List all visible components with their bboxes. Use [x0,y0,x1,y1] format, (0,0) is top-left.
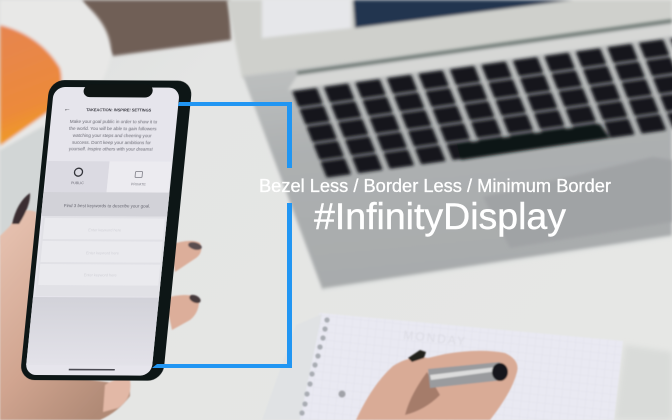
fingernail [408,350,426,362]
bottom finger [103,379,130,412]
private label: PRIVATE [131,182,147,187]
lower finger [165,295,199,330]
holding hand behind phone [0,193,203,420]
handwritten heading: MONDAY [403,328,468,349]
notebook page [262,313,623,420]
globe icon [74,168,83,176]
right hand [356,351,518,420]
keywords prompt: Find 3 best keywords to describe your goal. [64,203,151,209]
lower fingernail [188,293,202,305]
description text: watching your steps and cheering your [73,133,152,139]
pen highlight [430,367,498,380]
shadow between fingers [405,372,440,415]
lock icon [135,171,143,177]
home indicator [69,369,115,371]
notebook shadow [615,345,672,420]
description text: yourself. Inspire others with your dreams! [69,146,153,152]
public label: PUBLIC [71,181,84,185]
pen cap [492,363,508,381]
thumb fingernail [12,193,30,224]
notch [83,84,153,97]
phone body [20,80,193,381]
main hashtag title: #InfinityDisplay [314,196,566,237]
smartphone [20,80,193,381]
screen title: TAKEACTION: INSPIRE! SETTINGS [86,107,152,112]
keyword placeholders [84,228,121,277]
description text: success. Don't keep your ambitions for [72,140,152,145]
phone screen [25,84,180,376]
writing hand with pen [356,350,518,420]
dark wall at top [82,0,231,56]
upper finger [170,241,201,272]
bullet dot [338,390,346,398]
public option [44,161,110,192]
subtitle: Bezel Less / Border Less / Minimum Border [259,176,611,196]
trackpad [483,157,672,248]
private option [106,161,172,193]
blue bracket connector [152,102,292,368]
keyword fields [35,216,167,297]
keywords band [41,192,169,217]
back arrow: ← [63,106,71,113]
upper fingernail [187,241,203,251]
keyboard [291,29,672,179]
pen [428,362,504,388]
keyword placeholders: Enter keyword here [86,251,119,255]
notebook [262,313,672,420]
lower screen area [26,297,159,366]
laptop [227,0,672,291]
keyword placeholders: Enter keyword here [84,273,117,277]
keyword placeholders: Enter keyword here [88,228,121,232]
description text [67,119,158,152]
bowl with orange [0,0,111,245]
description text: Make your goal public in order to show it to [70,119,158,125]
palm and thumb [0,210,130,420]
laptop base [243,21,672,291]
spiral binding [299,317,330,416]
description text: the world. You will be able to gain followers [69,126,157,132]
laptop lid [227,0,672,78]
